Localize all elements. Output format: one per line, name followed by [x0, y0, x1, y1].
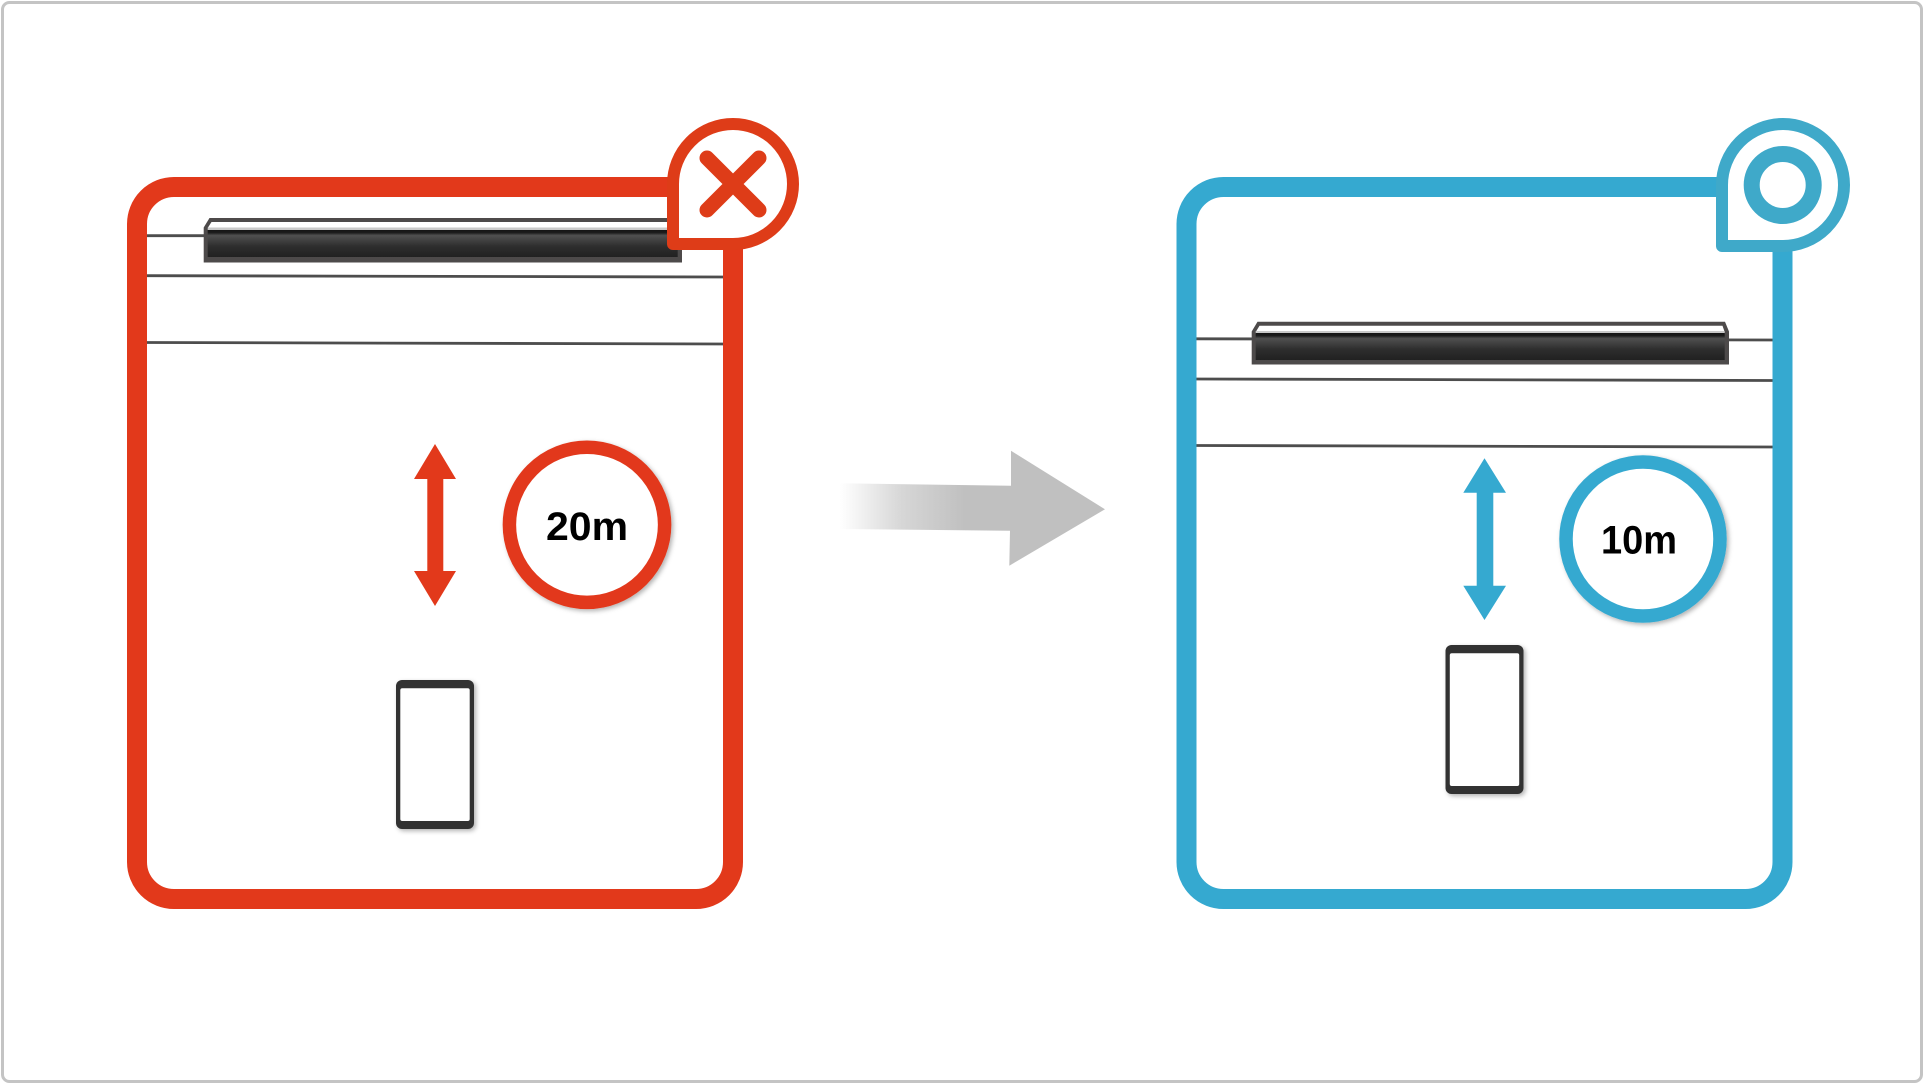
panel: before, 20m (red)	[137, 124, 793, 899]
arrow: transition	[840, 451, 1105, 566]
distance callout: 10m	[1566, 462, 1720, 616]
double arrow: distance	[414, 444, 456, 606]
distance callout: 20m	[509, 447, 665, 602]
road lines	[146, 236, 724, 344]
badge: circle	[1722, 124, 1844, 246]
phone	[396, 680, 474, 829]
overhead bar	[204, 218, 682, 262]
frame	[1186, 187, 1782, 899]
road lines	[1195, 339, 1774, 447]
distance callout: 20m: 20m	[546, 505, 628, 549]
double arrow: distance	[1463, 458, 1506, 620]
panel: after, 10m (blue)	[1186, 124, 1844, 899]
frame	[137, 187, 733, 899]
phone	[1446, 645, 1524, 794]
distance callout: 10m: 10m	[1601, 518, 1677, 562]
badge: cross	[673, 124, 793, 244]
overhead bar	[1252, 322, 1729, 364]
